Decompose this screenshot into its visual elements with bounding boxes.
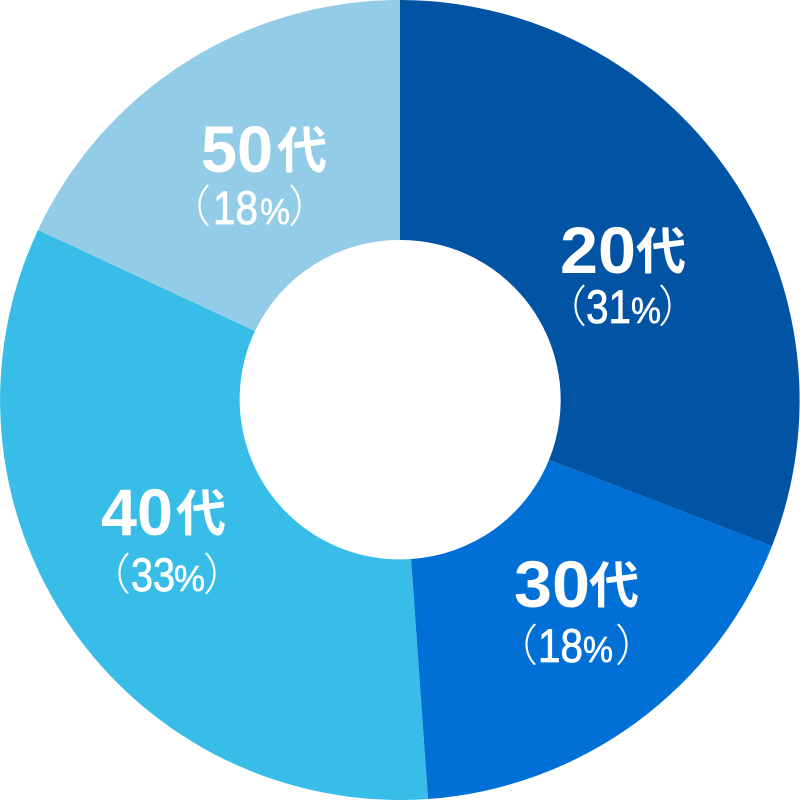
label: 30s: 代	[589, 546, 639, 618]
segment: 40s	[0, 230, 428, 800]
label: 20s: %	[631, 290, 661, 331]
segment: 30s	[411, 460, 772, 799]
label: 30s: 30	[514, 547, 590, 621]
label: 30s: （	[494, 610, 538, 674]
label: 20s: 20	[560, 213, 636, 287]
label: 50s: ）	[288, 171, 332, 235]
label: 20s: 代	[636, 212, 686, 284]
label: 40s: 40	[101, 475, 173, 549]
label: 30s: ）	[615, 610, 659, 674]
segment: 50s	[38, 0, 400, 331]
label: 40s	[87, 474, 247, 603]
label: 40s: （	[87, 539, 131, 603]
label: 50s: %	[260, 191, 290, 232]
label: 30s	[494, 546, 659, 674]
label: 40s: ）	[203, 539, 247, 603]
label: 20s: （	[543, 271, 587, 335]
label: 30s: %	[583, 629, 613, 670]
label: 30s: 18	[538, 619, 583, 672]
label: 50s	[167, 111, 332, 235]
label: 20s: ）	[658, 271, 702, 335]
label: 40s: 33	[131, 548, 175, 601]
label: 20s: 31	[586, 280, 631, 333]
label: 20s	[543, 212, 702, 335]
label: 50s: 50	[201, 112, 273, 186]
label: 40s: %	[174, 558, 205, 599]
label: 50s: 代	[277, 111, 327, 183]
label: 50s: （	[167, 171, 211, 235]
label: 40s: 代	[176, 474, 226, 546]
label: 50s: 18	[213, 181, 258, 234]
segment: 20s	[400, 0, 800, 546]
